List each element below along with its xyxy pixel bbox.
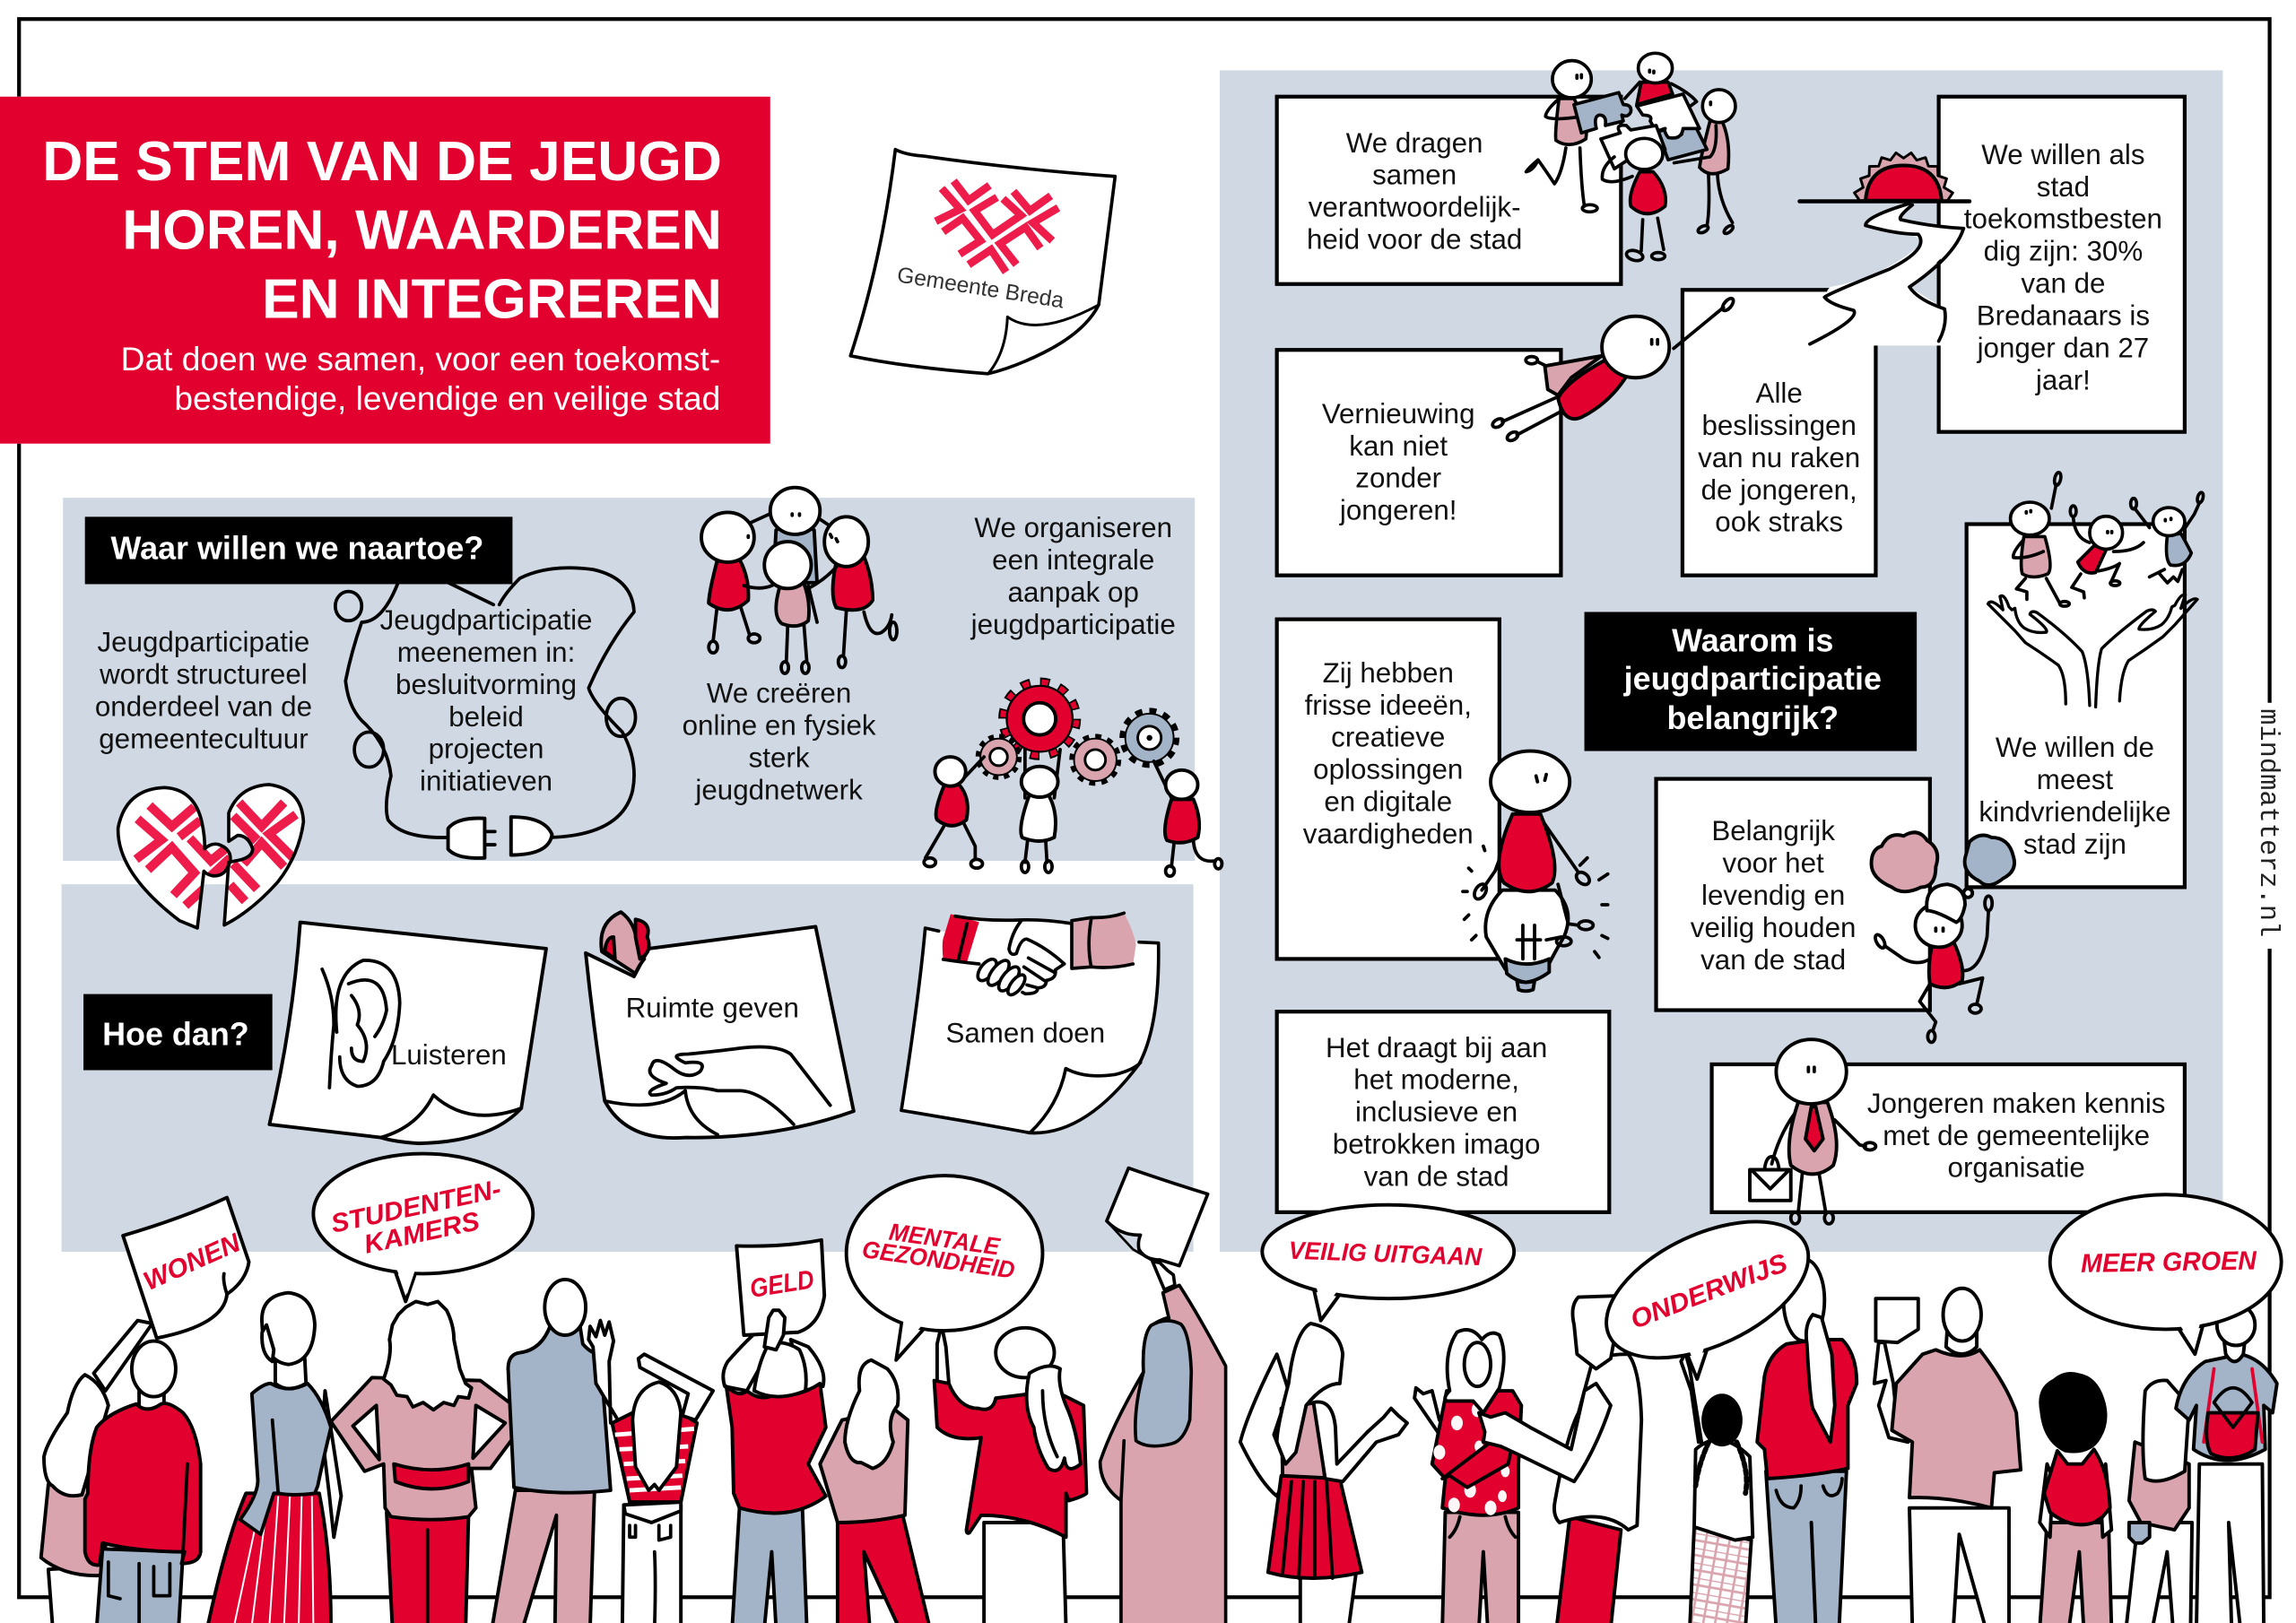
person: white hair with pink top — [41, 1321, 152, 1623]
text: cable list: meenemen in: — [397, 637, 575, 668]
text: online en fysiek: jeugdnetwerk — [694, 774, 863, 805]
icon: businessman — [1750, 1039, 1875, 1224]
text: integrale aanpak: een integrale — [992, 544, 1154, 576]
box: gemeentelijke organisatie: met de gemeentelijke — [1883, 1120, 2150, 1151]
grey gear — [1123, 711, 1176, 764]
box: verantwoordelijkheid: We dragen — [1346, 127, 1483, 159]
box: Alle beslissingen: ook straks — [1715, 507, 1843, 538]
text: integrale aanpak: aanpak op — [1008, 577, 1139, 608]
box: imago: betrokken imago — [1333, 1129, 1540, 1160]
big red gear — [1003, 682, 1076, 755]
box: Zij hebben: vaardigheden — [1303, 818, 1474, 849]
box: toekomstbestendig: jaar! — [2035, 364, 2091, 395]
hands — [1988, 595, 2197, 707]
box: imago: Het draagt bij aan — [1326, 1032, 1547, 1063]
box: Vernieuwing: zonder — [1355, 463, 1441, 494]
icon: figures with puzzle — [1526, 53, 1735, 263]
child red — [2070, 506, 2144, 598]
box: kindvriendelijke stad — [1967, 525, 2185, 887]
icon: ear — [322, 960, 400, 1088]
logo mark — [935, 181, 1058, 272]
heading: Waar willen we naartoe: Waar willen we naartoe? — [111, 530, 483, 567]
text: cable list: initiatieven — [420, 766, 552, 797]
box: toekomstbestendig: We willen als — [1981, 139, 2145, 170]
title block — [0, 97, 770, 444]
bubble: veilig uitgaan: VEILIG UITGAAN — [1288, 1237, 1483, 1271]
box: levendig en veilig: voor het — [1723, 847, 1824, 879]
icon: open hand — [649, 1047, 831, 1124]
box: levendig en veilig: veilig houden — [1691, 912, 1856, 943]
box: levendig en veilig: levendig en — [1701, 880, 1845, 911]
box: kindvriendelijke stad: meest — [2037, 764, 2113, 795]
box: imago — [1277, 1011, 1609, 1212]
heading: Waarom is jeugdparticipatie belangrijk: jeugdparticipatie — [1623, 660, 1882, 697]
heading: Waarom is jeugdparticipatie belangrijk: belangrijk? — [1667, 699, 1839, 736]
text: cable list: besluitvorming — [396, 669, 577, 700]
bubble: veilig uitgaan — [1262, 1205, 1514, 1321]
bubble: mentale gezondheid: MENTALE — [887, 1219, 1002, 1261]
sign: wonen — [123, 1198, 249, 1338]
text: cable list: beleid — [448, 701, 524, 733]
box: Zij hebben: frisse ideeën, — [1305, 690, 1472, 721]
icon: jumping children and holding hands — [1988, 472, 2205, 707]
logo note: Gemeente Breda — [850, 150, 1115, 374]
plug left — [448, 818, 484, 858]
people group: left — [41, 1168, 1226, 1623]
box: levendig en veilig: van de stad — [1700, 944, 1846, 976]
text: structureel onderdeel: onderdeel van de — [95, 690, 312, 722]
subtitle: Dat doen we samen, voor een toekomst- — [121, 340, 720, 378]
person: hijab raising sign — [1100, 1168, 1226, 1623]
box: levendig en veilig — [1657, 779, 1930, 1011]
text: cable list: Jeugdparticipatie — [380, 604, 592, 636]
person: red blouse long hair — [935, 1325, 1086, 1623]
box: verantwoordelijkheid: heid voor de stad — [1307, 224, 1522, 256]
person: polka dots — [1414, 1330, 1521, 1623]
box: Alle beslissingen: beslissingen — [1701, 410, 1857, 441]
figure front red — [1631, 172, 1665, 213]
bubble: studentenkamers — [313, 1154, 533, 1301]
box: toekomstbestendig: jonger dan 27 — [1977, 332, 2149, 363]
box: Vernieuwing: Vernieuwing — [1322, 398, 1475, 430]
text: structureel onderdeel: gemeentecultuur — [99, 723, 309, 754]
person: striped top kid — [588, 1321, 713, 1623]
box: Zij hebben: Zij hebben — [1323, 657, 1454, 689]
box: Alle beslissingen — [1683, 290, 1875, 576]
icon: puzzle heart — [118, 785, 303, 928]
icon: sun and winding road — [1800, 152, 1970, 345]
text: cable list: projecten — [429, 733, 544, 765]
heading: Hoe dan: Hoe dan? — [102, 1016, 249, 1053]
pink gear right — [1073, 737, 1118, 783]
box: gemeentelijke organisatie — [1712, 1064, 2185, 1212]
figure right pink — [1700, 121, 1728, 174]
bubble: studentenkamers: STUDENTEN- — [328, 1174, 503, 1239]
panel: hoe dan background — [62, 884, 1194, 1252]
sign: geld: GELD — [748, 1264, 816, 1304]
figure left pink — [1556, 99, 1587, 144]
box: Zij hebben: creatieve — [1331, 722, 1445, 753]
person: afro kid — [2039, 1372, 2111, 1623]
box: toekomstbestendig: dig zijn: 30% — [1984, 236, 2143, 267]
box: toekomstbestendig: van de — [2021, 268, 2105, 299]
title: DE STEM VAN DE JEUGD — [42, 131, 722, 193]
box: verantwoordelijkheid: verantwoordelijk- — [1309, 192, 1521, 223]
child grey — [2131, 491, 2205, 583]
bubble: mentale gezondheid — [847, 1176, 1042, 1360]
icon: flying figure — [1492, 297, 1735, 442]
text: structureel onderdeel: Jeugdparticipatie — [98, 627, 309, 658]
text: online en fysiek: We creëren — [707, 678, 851, 709]
bubble: meer groen — [2050, 1194, 2282, 1354]
label: Ruimte geven — [626, 993, 799, 1024]
figure back red — [1637, 82, 1673, 105]
bubble: meer groen: MEER GROEN — [2081, 1245, 2257, 1279]
box: kindvriendelijke stad: stad zijn — [2023, 829, 2126, 860]
title line 2: HOREN, WAARDEREN — [122, 200, 722, 262]
title line 3: EN INTEGREREN — [262, 268, 722, 330]
icon: climbing kid with thought clouds — [1872, 832, 2014, 1042]
logo text: Gemeente Breda — [895, 263, 1065, 313]
heading: Waar willen we naartoe — [85, 516, 512, 584]
briefcase — [1750, 1170, 1791, 1201]
note: Luisteren — [269, 923, 546, 1143]
person: pink tee holding paper — [1874, 1289, 2021, 1623]
note: Ruimte geven — [586, 912, 854, 1138]
subtitle line 2: bestendige, levendige en veilige stad — [174, 379, 720, 417]
box: verantwoordelijkheid — [1277, 97, 1621, 284]
heading: Waarom is jeugdparticipatie belangrijk — [1585, 612, 1917, 751]
box: toekomstbestendig: toekomstbesten — [1964, 204, 2162, 235]
person: pink top red skirt — [1240, 1324, 1407, 1623]
sign: geld — [736, 1240, 824, 1335]
panel: waar willen we naartoe background — [63, 498, 1195, 861]
person: pink sweater red pants — [331, 1301, 528, 1623]
box: levendig en veilig: Belangrijk — [1711, 815, 1835, 846]
child pink — [2011, 472, 2069, 606]
panel: right background — [1220, 70, 2222, 1252]
text: integrale aanpak: We organiseren — [974, 512, 1172, 543]
box: Vernieuwing — [1277, 350, 1561, 576]
box: Alle beslissingen: van nu raken — [1698, 442, 1860, 473]
sign: wonen: WONEN — [139, 1228, 246, 1297]
heading: Waarom is jeugdparticipatie belangrijk: Waarom is — [1672, 622, 1833, 659]
text: online en fysiek: online en fysiek — [683, 710, 876, 742]
box: imago: inclusieve en — [1355, 1097, 1518, 1128]
credit: mindmatterz.nl: mindmatterz.nl — [2252, 708, 2283, 937]
pink gear left — [978, 737, 1019, 777]
box: Zij hebben — [1277, 620, 1500, 959]
icon: cable with plug — [335, 568, 636, 858]
bubble: studentenkamers: KAMERS — [361, 1206, 483, 1260]
box: Vernieuwing: kan niet — [1349, 430, 1448, 462]
person: pink top red pants — [820, 1360, 930, 1623]
icon: people with gears — [924, 682, 1222, 876]
person: red shirt holding sign — [723, 1240, 826, 1623]
icon: group of four people — [701, 488, 897, 673]
text: integrale aanpak: jeugdparticipatie — [970, 609, 1176, 640]
box: kindvriendelijke stad: We willen de — [1996, 732, 2154, 763]
box: toekomstbestendig: stad — [2037, 171, 2090, 203]
box: verantwoordelijkheid: samen — [1372, 160, 1457, 191]
sign: paper held up — [1107, 1168, 1208, 1266]
box: gemeentelijke organisatie: organisatie — [1948, 1152, 2085, 1184]
box: Vernieuwing: jongeren! — [1339, 495, 1457, 526]
box: kindvriendelijke stad: kindvriendelijke — [1979, 796, 2171, 828]
box: imago: van de stad — [1364, 1160, 1509, 1192]
icon: figure on light bulb — [1463, 751, 1608, 991]
people group: right — [1240, 1259, 2277, 1623]
box: Alle beslissingen: de jongeren, — [1701, 474, 1857, 506]
icon: butterfly — [601, 912, 649, 974]
person: kid black hair — [1681, 1353, 1752, 1623]
box: Zij hebben: en digitale — [1324, 786, 1452, 818]
bubble: onderwijs — [1586, 1193, 1829, 1386]
box: Alle beslissingen: Alle — [1756, 378, 1803, 409]
person: white shirt red pants — [1479, 1296, 1641, 1623]
box: Zij hebben: oplossingen — [1313, 754, 1463, 785]
puzzle pieces — [1574, 92, 1707, 169]
box: toekomstbestendig — [1939, 97, 2185, 432]
label: Samen doen — [945, 1018, 1105, 1049]
box: imago: het moderne, — [1353, 1064, 1519, 1096]
person: red shirt jeans ponytail — [1757, 1259, 1857, 1623]
note: Samen doen — [901, 913, 1159, 1133]
person: grey top striped skirt — [208, 1293, 341, 1623]
label: Luisteren — [391, 1039, 507, 1071]
heading: Hoe dan — [83, 994, 273, 1070]
plug right — [511, 817, 552, 855]
person: white hair pink top purse — [2126, 1380, 2192, 1623]
box: gemeentelijke organisatie: Jongeren maken kennis — [1867, 1088, 2165, 1119]
box: toekomstbestendig: Bredanaars is — [1977, 299, 2150, 331]
person: grey tee red backpack — [2176, 1305, 2277, 1623]
person: red sweater jeans — [85, 1341, 201, 1623]
person: grey turtleneck pink pants — [492, 1280, 611, 1623]
icon: handshake — [943, 913, 1136, 998]
bubble: mentale gezondheid: GEZONDHEID — [860, 1236, 1016, 1284]
text: online en fysiek: sterk — [749, 742, 810, 774]
text: structureel onderdeel: wordt structureel — [99, 658, 308, 690]
bubble: onderwijs: ONDERWIJS — [1626, 1248, 1792, 1335]
